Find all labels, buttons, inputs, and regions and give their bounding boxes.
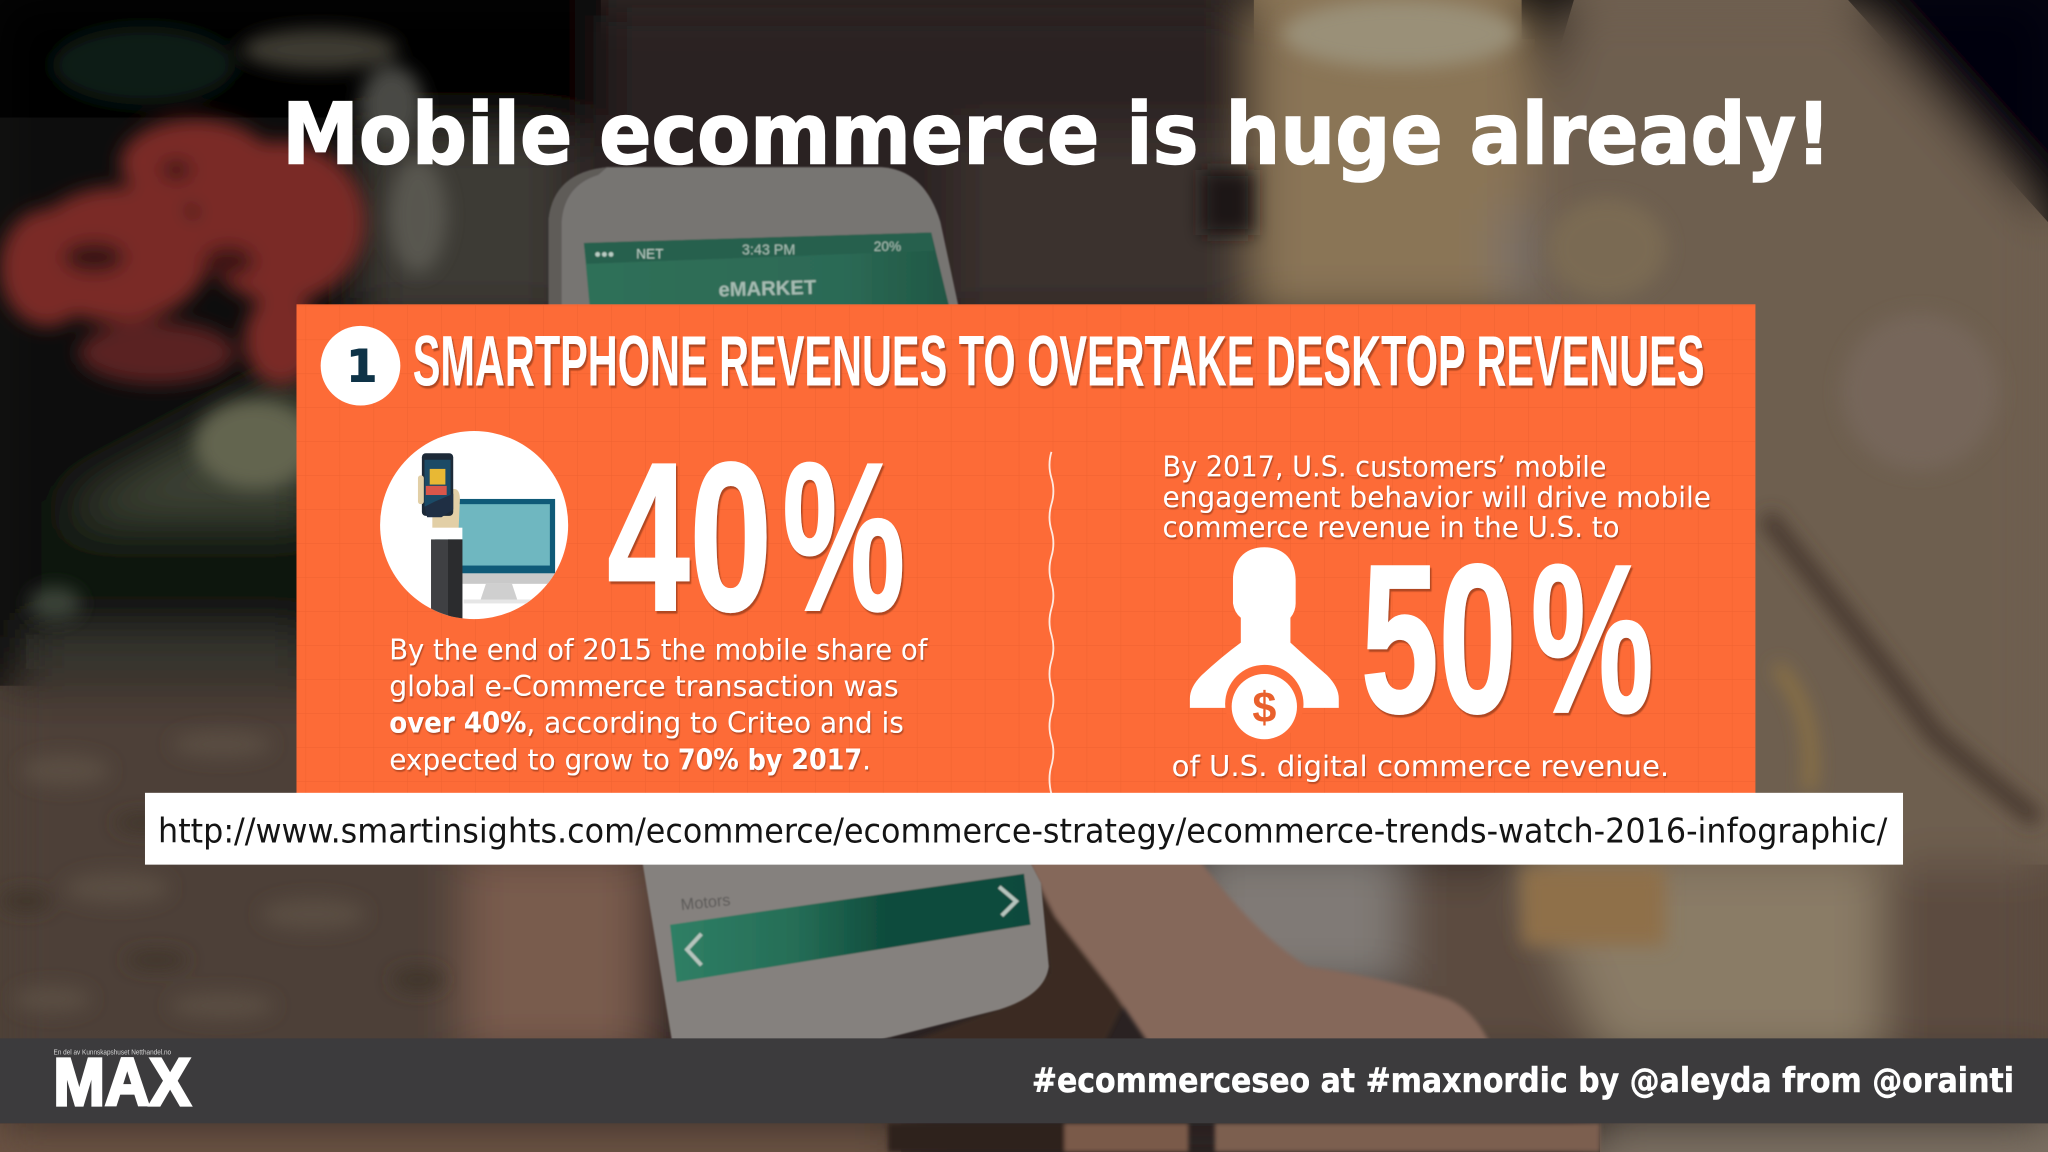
phone top bbox=[549, 167, 960, 313]
stat: 40%: % bbox=[782, 418, 905, 655]
mottled table bbox=[13, 731, 423, 1019]
text: right description: By 2017, U.S. customers’ mobile bbox=[1162, 450, 1607, 484]
source url bar bbox=[145, 793, 1903, 865]
stat: 50%: 50 bbox=[1361, 520, 1516, 757]
phone bottom: Motors bbox=[680, 891, 731, 914]
wood streak bbox=[1766, 516, 2038, 820]
phone top: NET bbox=[636, 247, 664, 262]
stat: 50%: % bbox=[1531, 520, 1654, 757]
text: revenue caption: of U.S. digital commerce revenue. bbox=[1172, 749, 1669, 783]
title: Mobile ecommerce is huge already! bbox=[282, 85, 1831, 184]
text: left description: 70% by 2017 bbox=[678, 742, 862, 776]
number badge bbox=[321, 326, 400, 406]
logo: MAX: MAX bbox=[54, 1046, 191, 1120]
source url bar: http://www.smartinsights.com/ecommerce/ecommerce-strategy/ecommerce-trends-watch-2016-infographic/ bbox=[158, 811, 1888, 851]
icon: person with dollar coin bbox=[1190, 547, 1339, 743]
icon: person with dollar coin: $ bbox=[1252, 684, 1276, 732]
logo: MAX: En del av Kunnskapshuset Netthandel.no bbox=[54, 1048, 171, 1057]
text: left description: over 40% bbox=[389, 706, 526, 740]
phone top: eMARKET bbox=[718, 277, 817, 301]
phone top: 20% bbox=[874, 239, 901, 254]
phone top: 3:43 PM bbox=[742, 243, 795, 259]
icon: phone and desktop bbox=[380, 431, 568, 624]
text: left description: . bbox=[862, 742, 871, 776]
text: right description: engagement behavior will drive mobile bbox=[1162, 480, 1711, 514]
panel: smartphone revenues bbox=[296, 304, 1755, 794]
text: left description: expected to grow to bbox=[389, 742, 670, 776]
number badge: 1 bbox=[346, 341, 377, 392]
flowers bbox=[0, 119, 366, 385]
phone top: ●●● bbox=[594, 248, 614, 260]
footer bar bbox=[0, 1038, 2048, 1123]
text: left description: By the end of 2015 the mobile share of bbox=[389, 633, 928, 667]
wavy divider bbox=[1049, 452, 1053, 794]
text: left description: global e-Commerce transaction was bbox=[389, 669, 899, 703]
text: left description: , according to Criteo and is bbox=[526, 706, 904, 740]
stat: 40%: 40 bbox=[607, 418, 772, 655]
hand finger bbox=[1024, 856, 1490, 1045]
text: right description bbox=[1162, 450, 1711, 544]
dark gap near fingers bbox=[901, 878, 1123, 1045]
text: left description bbox=[389, 633, 928, 776]
phone bottom bbox=[641, 856, 1049, 1045]
text: right description: commerce revenue in the U.S. to bbox=[1162, 510, 1620, 544]
